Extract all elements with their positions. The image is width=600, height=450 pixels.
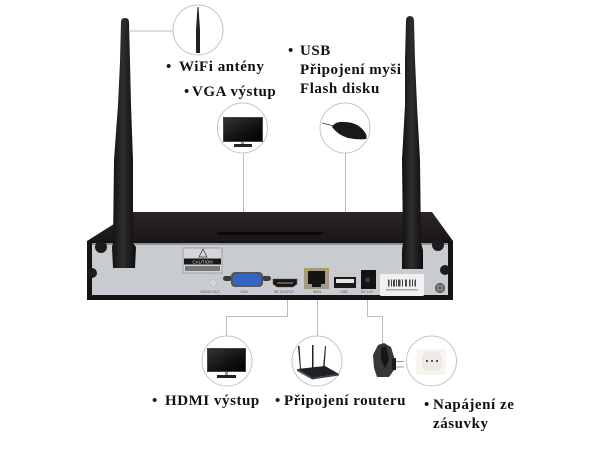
label: USB: Připojení myši <box>300 62 401 78</box>
HDMI port: HD OUTPUT <box>274 290 295 294</box>
circle: router <box>292 336 342 386</box>
label: Připojení routeru: • <box>275 393 281 409</box>
circle: mouse <box>320 103 370 153</box>
label: USB: Flash disku <box>300 81 380 97</box>
label: USB: • <box>288 43 294 59</box>
caution label <box>183 248 222 273</box>
connector lines <box>130 31 382 345</box>
VGA port <box>223 272 271 294</box>
NVR recorder <box>87 212 453 300</box>
label: WiFi antény: • <box>166 59 172 75</box>
label: Připojení routeru: Připojení routeru <box>284 393 406 409</box>
label: Napájení ze zásuvky: • <box>424 397 430 413</box>
corner screws <box>87 239 450 278</box>
label: VGA výstup: • <box>184 84 190 100</box>
recorder top face <box>87 212 453 244</box>
label: USB: USB <box>300 43 331 59</box>
VGA port: VGA <box>240 290 248 294</box>
circle: wall socket <box>406 336 456 386</box>
label: Napájení ze zásuvky: zásuvky <box>433 416 489 432</box>
USB port <box>334 277 356 294</box>
right antenna <box>402 16 423 269</box>
left antenna <box>112 18 136 268</box>
caution label: CAUTION <box>192 260 213 264</box>
power port: DC 12V <box>361 290 374 294</box>
recorder back panel <box>87 241 453 300</box>
label: USB <box>288 43 401 97</box>
audio out port <box>200 280 221 294</box>
barcode sticker <box>380 274 424 296</box>
circle: VGA monitor <box>218 103 268 153</box>
power port <box>361 270 376 294</box>
ground screw <box>436 284 444 292</box>
power adapter <box>373 343 404 377</box>
HDMI port <box>273 279 297 294</box>
label: Napájení ze zásuvky: Napájení ze <box>433 397 514 413</box>
label: Napájení ze zásuvky <box>424 397 514 432</box>
LAN port <box>304 268 329 294</box>
circle: HDMI monitor <box>202 336 252 386</box>
label: WiFi antény: WiFi antény <box>179 59 264 75</box>
USB port: USB <box>340 290 348 294</box>
circle: antenna <box>173 5 223 55</box>
audio out port: AUDIO OUT <box>200 290 221 294</box>
label: HDMI výstup: • <box>152 393 158 409</box>
LAN port: WAN <box>313 290 321 294</box>
label: HDMI výstup: HDMI výstup <box>165 393 260 409</box>
label: VGA výstup: VGA výstup <box>192 84 276 100</box>
